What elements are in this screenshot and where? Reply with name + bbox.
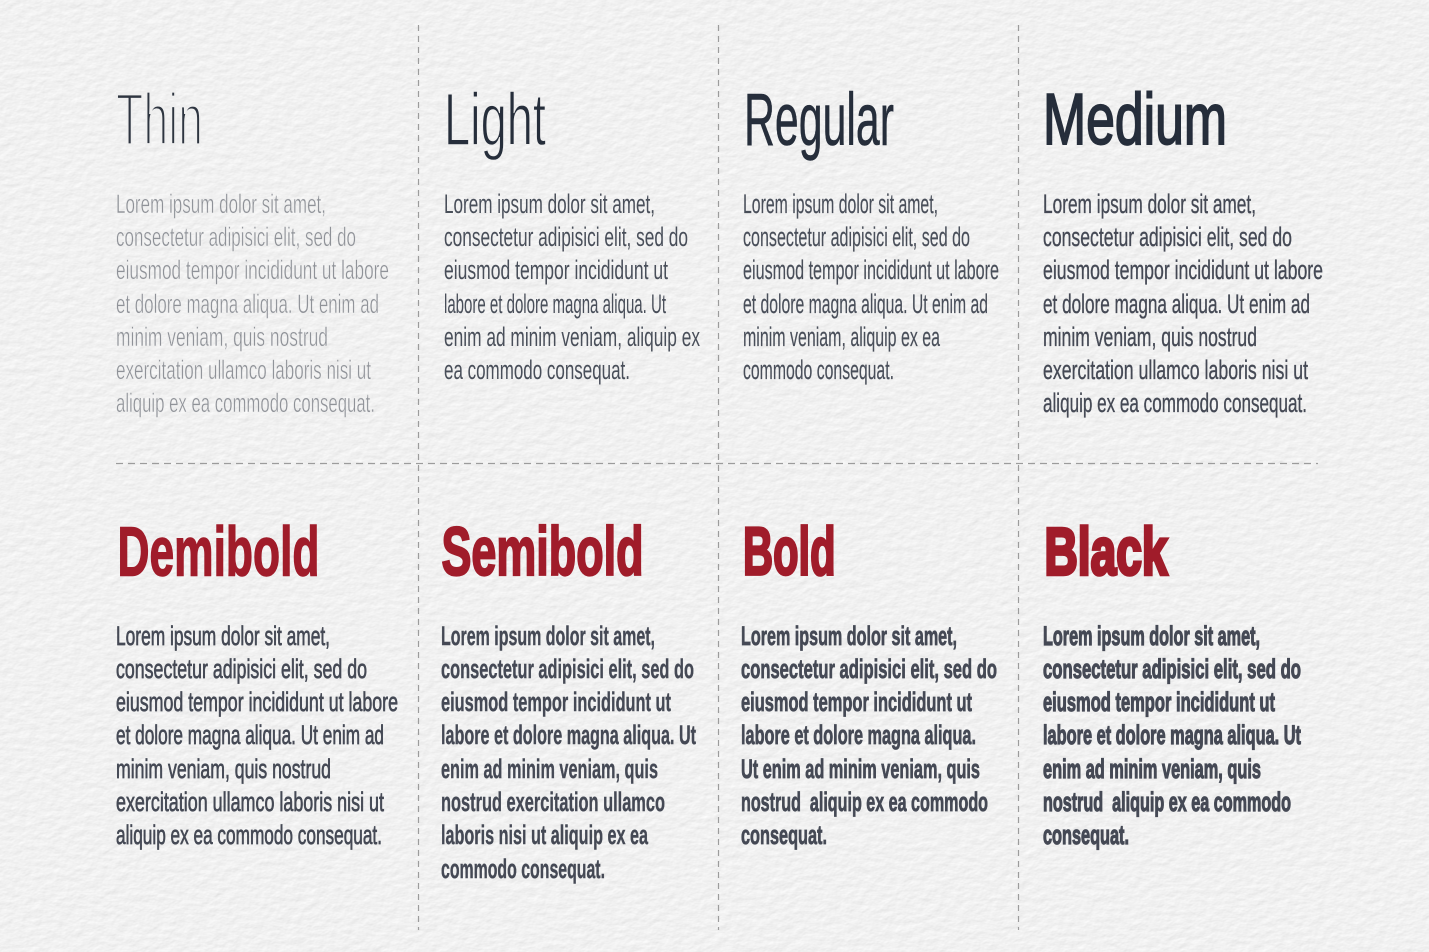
text block: Demibold sample: aliquip ex ea commodo consequat. bbox=[116, 820, 382, 850]
text block: Medium sample bbox=[1043, 189, 1323, 418]
text block: Demibold sample: eiusmod tempor incididunt ut labore bbox=[116, 687, 398, 717]
text block: Demibold sample: et dolore magna aliqua. Ut enim ad bbox=[116, 720, 384, 750]
text block: Regular sample: minim veniam, aliquip ex ea bbox=[743, 322, 941, 352]
text block: Bold sample: nostrud aliquip ex ea commodo bbox=[741, 787, 988, 817]
heading: Medium: Medium bbox=[1043, 80, 1227, 160]
text block: Demibold sample: consectetur adipisici elit, sed do bbox=[116, 654, 367, 684]
text block: Regular sample: et dolore magna aliqua. Ut enim ad bbox=[743, 289, 988, 319]
text block: Semibold sample: commodo consequat. bbox=[441, 854, 605, 884]
text block: Black sample: Lorem ipsum dolor sit amet, bbox=[1043, 621, 1260, 651]
text block: Semibold sample: Lorem ipsum dolor sit amet, bbox=[441, 621, 655, 651]
text block: Regular sample: Lorem ipsum dolor sit amet, bbox=[743, 189, 938, 219]
text block: Demibold sample: exercitation ullamco laboris nisi ut bbox=[116, 787, 384, 817]
text block: Thin sample bbox=[116, 189, 389, 418]
text block: Light sample: consectetur adipisici elit, sed do bbox=[444, 222, 688, 252]
text block: Black sample bbox=[1043, 621, 1301, 850]
text block: Thin sample: Lorem ipsum dolor sit amet, bbox=[116, 189, 326, 219]
text block: Medium sample: consectetur adipisici elit, sed do bbox=[1043, 222, 1292, 252]
panel: Semibold bbox=[441, 513, 696, 884]
text block: Light sample: enim ad minim veniam, aliquip ex bbox=[444, 322, 700, 352]
panel: Bold bbox=[741, 514, 997, 850]
text block: Semibold sample: consectetur adipisici elit, sed do bbox=[441, 654, 694, 684]
text block: Regular sample bbox=[743, 189, 999, 385]
text block: Light sample: eiusmod tempor incididunt ut bbox=[444, 255, 668, 285]
text block: Demibold sample bbox=[116, 621, 398, 850]
panel: Regular bbox=[743, 78, 999, 385]
text block: Semibold sample: nostrud exercitation ullamco bbox=[441, 787, 665, 817]
text block: Light sample bbox=[444, 189, 700, 385]
text block: Bold sample: consequat. bbox=[741, 820, 827, 850]
text block: Bold sample bbox=[741, 621, 997, 850]
text block: Thin sample: et dolore magna aliqua. Ut enim ad bbox=[116, 289, 379, 319]
text block: Bold sample: eiusmod tempor incididunt ut bbox=[741, 687, 972, 717]
text block: Semibold sample bbox=[441, 621, 696, 884]
text block: Thin sample: minim veniam, quis nostrud bbox=[116, 322, 328, 352]
panel: Medium bbox=[1043, 80, 1323, 418]
text block: Bold sample: Lorem ipsum dolor sit amet, bbox=[741, 621, 957, 651]
text block: Black sample: eiusmod tempor incididunt ut bbox=[1043, 687, 1275, 717]
panel: Thin bbox=[116, 78, 389, 418]
text block: Thin sample: exercitation ullamco laboris nisi ut bbox=[116, 355, 371, 385]
text block: Black sample: enim ad minim veniam, quis bbox=[1043, 754, 1261, 784]
text block: Light sample: labore et dolore magna aliqua. Ut bbox=[444, 289, 666, 319]
heading: Thin: Thin bbox=[116, 78, 203, 161]
text block: Regular sample: consectetur adipisici elit, sed do bbox=[743, 222, 970, 252]
heading: Black: Black bbox=[1044, 514, 1168, 590]
heading: Light: Light bbox=[444, 78, 546, 161]
panel: Black bbox=[1043, 514, 1301, 850]
text block: Bold sample: labore et dolore magna aliqua. bbox=[741, 720, 976, 750]
panel: Light bbox=[444, 78, 700, 385]
heading: Semibold: Semibold bbox=[442, 513, 644, 590]
text block: Semibold sample: laboris nisi ut aliquip ex ea bbox=[441, 820, 649, 850]
panel: Demibold bbox=[116, 512, 398, 850]
text block: Demibold sample: minim veniam, quis nostrud bbox=[116, 754, 331, 784]
text block: Bold sample: Ut enim ad minim veniam, quis bbox=[741, 754, 980, 784]
text block: Bold sample: consectetur adipisici elit, sed do bbox=[741, 654, 997, 684]
text block: Thin sample: aliquip ex ea commodo consequat. bbox=[116, 388, 375, 418]
text block: Semibold sample: labore et dolore magna aliqua. Ut bbox=[441, 720, 696, 750]
heading: Regular: Regular bbox=[744, 78, 894, 161]
text block: Light sample: ea commodo consequat. bbox=[444, 355, 630, 385]
text block: Medium sample: minim veniam, quis nostrud bbox=[1043, 322, 1257, 352]
text block: Regular sample: commodo consequat. bbox=[743, 355, 894, 385]
text block: Black sample: consequat. bbox=[1043, 820, 1129, 850]
heading: Demibold: Demibold bbox=[118, 512, 320, 590]
text block: Semibold sample: eiusmod tempor incididunt ut bbox=[441, 687, 671, 717]
heading: Bold: Bold bbox=[743, 514, 836, 590]
text block: Demibold sample: Lorem ipsum dolor sit amet, bbox=[116, 621, 330, 651]
text block: Thin sample: eiusmod tempor incididunt ut labore bbox=[116, 255, 389, 285]
text block: Medium sample: Lorem ipsum dolor sit amet, bbox=[1043, 189, 1256, 219]
text block: Light sample: Lorem ipsum dolor sit amet, bbox=[444, 189, 655, 219]
text block: Thin sample: consectetur adipisici elit, sed do bbox=[116, 222, 356, 252]
text block: Regular sample: eiusmod tempor incididunt ut labore bbox=[743, 255, 999, 285]
text block: Semibold sample: enim ad minim veniam, quis bbox=[441, 754, 658, 784]
